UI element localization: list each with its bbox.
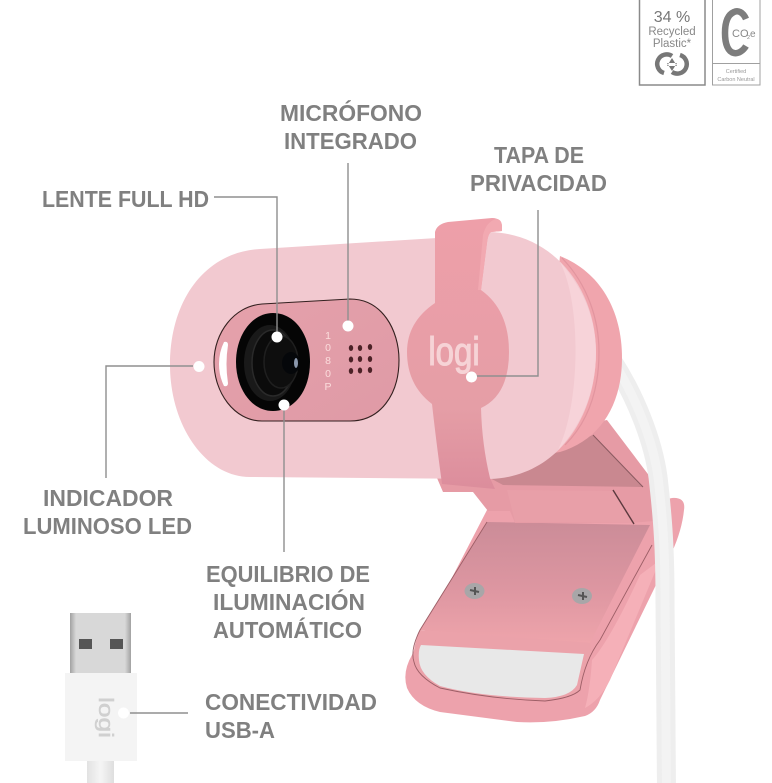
badge: 34% recycled plastic (640, 0, 705, 85)
rear housing (540, 256, 622, 455)
label: lente full hd: LENTE FULL HD (42, 186, 209, 212)
label: indicador luminoso led (23, 485, 192, 539)
badge: certified carbon neutral: CO (732, 28, 749, 40)
badge: certified carbon neutral: Carbon Neutral (717, 77, 755, 83)
1080P label: P (324, 381, 332, 393)
status light (219, 342, 228, 386)
label: equilibrio de iluminación automático: AUTOMÁTICO (213, 616, 362, 643)
1080P label (324, 330, 332, 393)
privacy strap (407, 218, 509, 489)
label: equilibrio de iluminación automático: EQUILIBRIO DE (206, 561, 370, 587)
1080P label: 0 (325, 368, 331, 380)
1080P label: 0 (325, 342, 331, 354)
webcam illustration (170, 218, 684, 783)
usb-a connector: logi (94, 697, 116, 738)
label: micrófono integrado (280, 99, 422, 154)
badge: 34% recycled plastic: Plastic* (653, 38, 692, 50)
label: conectividad usb-a (205, 689, 377, 743)
privacy strap: logi (428, 329, 480, 374)
badge: 34% recycled plastic: Recycled (648, 26, 696, 38)
label: indicador luminoso led: INDICADOR (43, 485, 173, 511)
label: micrófono integrado: INTEGRADO (284, 128, 417, 154)
clip base (405, 498, 684, 722)
faceplate (214, 299, 399, 421)
label: tapa de privacidad (470, 142, 607, 196)
badge: certified carbon neutral: Certified (726, 69, 746, 75)
badge: certified carbon neutral (712, 0, 760, 85)
label: tapa de privacidad: TAPA DE (494, 142, 584, 168)
1080P label: 8 (325, 355, 331, 367)
label: tapa de privacidad: PRIVACIDAD (470, 170, 607, 196)
label: indicador luminoso led: LUMINOSO LED (23, 513, 192, 539)
label: conectividad usb-a: CONECTIVIDAD (205, 689, 377, 715)
cable to camera (612, 360, 666, 783)
label: equilibrio de iluminación automático: ILUMINACIÓN (213, 588, 365, 615)
pale camera body (170, 232, 596, 479)
hinge arm (437, 420, 665, 524)
label: equilibrio de iluminación automático (206, 561, 370, 643)
label: conectividad usb-a: USB-A (205, 717, 275, 743)
lens (236, 313, 310, 411)
usb-a connector (65, 613, 188, 783)
label: micrófono integrado: MICRÓFONO (280, 99, 422, 126)
white pad (419, 645, 584, 698)
badge: 34% recycled plastic: 34 % (654, 9, 690, 26)
badge: certified carbon neutral: 2 (747, 35, 750, 41)
screws (464, 583, 592, 604)
microphone grille (349, 344, 372, 374)
1080P label: 1 (325, 330, 331, 342)
callout lines and dots (106, 163, 538, 552)
badge: certified carbon neutral: e (750, 29, 756, 40)
